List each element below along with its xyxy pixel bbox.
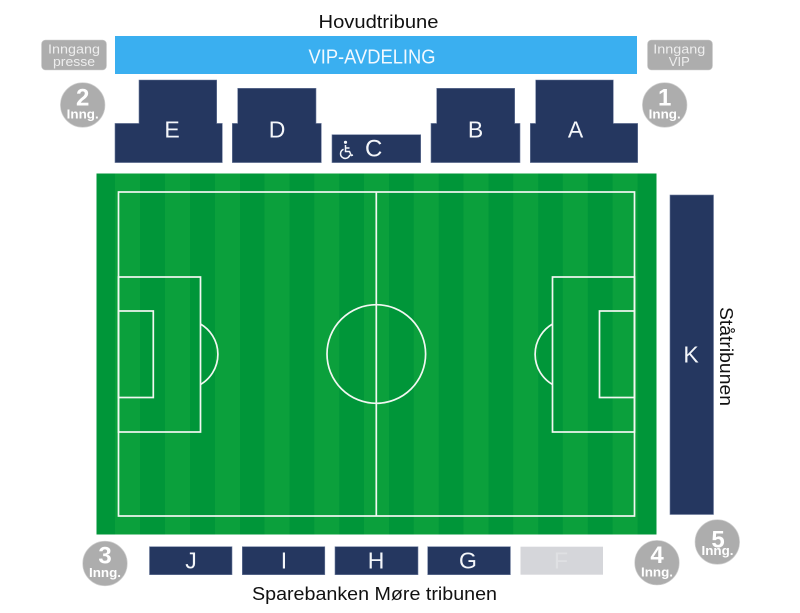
panel: VIP section — [115, 36, 637, 74]
panel: VIP section: VIP-AVDELING — [308, 46, 436, 68]
label: Inngang VIP: Inngang — [653, 42, 705, 56]
label: Ståtribunen: Ståtribunen — [716, 307, 736, 406]
stand A: A — [568, 116, 584, 142]
entrance 1 badge: Inng. — [649, 106, 681, 122]
label: Inngang presse — [42, 40, 106, 70]
stand B: B — [468, 116, 483, 142]
entrance 4 badge: 4 — [650, 542, 664, 569]
entrance 2 badge: 2 — [76, 84, 89, 112]
entrance 4 badge — [635, 540, 679, 585]
entrance 5 badge: Inng. — [702, 543, 734, 558]
stand J: J — [185, 548, 197, 574]
entrance 2 badge: Inng. — [67, 106, 99, 122]
stand G — [428, 547, 510, 575]
football pitch — [96, 174, 656, 534]
stand A — [530, 80, 638, 163]
label: Inngang presse: Inngang — [48, 42, 100, 56]
pitch markings — [118, 192, 634, 516]
label: Sparebanken Møre tribunen: Sparebanken Møre tribunen — [252, 584, 497, 604]
stand D — [232, 88, 321, 163]
stand E — [115, 80, 222, 163]
label: Inngang VIP: VIP — [669, 54, 690, 69]
stand B — [431, 88, 520, 163]
entrance 2 badge — [60, 83, 105, 127]
stand I — [242, 547, 325, 575]
stand K: K — [683, 342, 699, 368]
entrance 3 badge — [83, 541, 127, 586]
stand H: H — [368, 548, 384, 574]
entrance 5 badge — [695, 520, 740, 564]
stand H — [335, 547, 418, 575]
stand J — [150, 547, 232, 575]
stand C — [332, 135, 421, 163]
stand K — [670, 195, 714, 514]
stand C: C — [365, 136, 382, 162]
icon: wheelchair — [341, 141, 353, 158]
stand F (inactive): F — [554, 548, 568, 574]
entrance 1 badge — [642, 83, 687, 127]
stand F (inactive) — [520, 547, 603, 575]
entrance 5 badge: 5 — [711, 526, 725, 554]
grass stripes — [115, 174, 638, 534]
label: Inngang presse: presse — [53, 54, 95, 69]
entrance 4 badge: Inng. — [641, 565, 673, 580]
entrance 3 badge: Inng. — [89, 565, 121, 580]
label: Inngang VIP — [648, 40, 712, 70]
entrance 3 badge: 3 — [98, 542, 112, 570]
stand G: G — [459, 548, 477, 574]
entrance 1 badge: 1 — [658, 84, 671, 112]
heading: Hovudtribune: Hovudtribune — [318, 12, 438, 32]
stand D: D — [269, 116, 285, 142]
stand I: I — [281, 548, 287, 574]
stand E: E — [164, 116, 180, 142]
